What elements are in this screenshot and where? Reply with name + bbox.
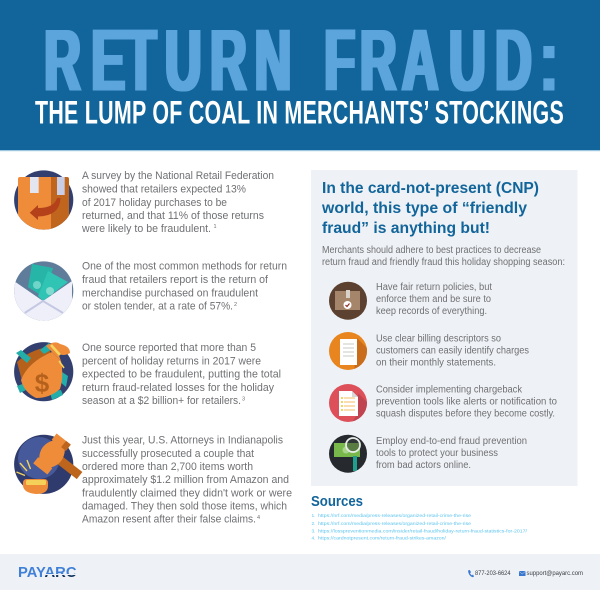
- text: Indianapolis paragraph: approximately $1.2 million from Amazon and: [82, 474, 289, 486]
- sources list: https://nrf.com/media/press-releases/organized-retail-crime-the-rise: [318, 521, 471, 527]
- text: fraud prevention tools: tools to protect your business: [376, 448, 498, 459]
- text: holiday returns paragraph: season at a $2 billion+ for retailers.: [82, 395, 241, 407]
- text: holiday returns paragraph: 3: [242, 396, 245, 402]
- header banner: [0, 0, 600, 151]
- text: survey paragraph: [81, 170, 274, 235]
- text: common methods paragraph: or stolen tender, at a rate of 57%.: [82, 301, 233, 313]
- sources list: 3.: [312, 528, 316, 534]
- icon: returned package: [14, 170, 73, 232]
- panel heading: [321, 180, 539, 237]
- sources list: 1.: [312, 513, 316, 519]
- text: Indianapolis paragraph: Amazon resent after their false claims.: [82, 514, 256, 526]
- panel intro text: Merchants should adhere to best practices to decrease: [322, 245, 541, 256]
- icon: money bag: [14, 342, 73, 401]
- sources heading: Sources: [311, 493, 363, 510]
- text: holiday returns paragraph: percent of holiday returns in 2017 were: [82, 355, 261, 367]
- support email: support@payarc.com: [526, 571, 583, 577]
- text: fraud prevention tools: [376, 436, 527, 471]
- text: survey paragraph: A survey by the National Retail Federation: [82, 170, 274, 182]
- text: chargeback prevention: Consider implementing chargeback: [376, 385, 523, 396]
- text: holiday returns paragraph: expected to be fraudulent, putting the total: [82, 369, 281, 381]
- text: survey paragraph: were likely to be fraudulent.: [81, 223, 211, 235]
- panel: CNP best practices: [311, 170, 578, 486]
- phone number: 877-203-6624: [475, 571, 511, 577]
- text: billing descriptors: on their monthly statements.: [376, 358, 496, 368]
- icon: envelope: [519, 571, 526, 576]
- text: Indianapolis paragraph: 4: [257, 515, 260, 521]
- text: holiday returns paragraph: [82, 342, 281, 407]
- text: fair return policies: keep records of everything.: [376, 306, 487, 317]
- icon: checklist document: [329, 384, 367, 422]
- text: fraud prevention tools: Employ end-to-end fraud prevention: [376, 436, 527, 447]
- panel heading: In the card-not-present (CNP): [322, 180, 539, 197]
- logo: PAYARC: [18, 565, 77, 581]
- text: billing descriptors: Use clear billing descriptors so: [376, 334, 501, 345]
- text: common methods paragraph: merchandise purchased on fraudulent: [82, 287, 258, 299]
- text: chargeback prevention: prevention tools like alerts or notification to: [376, 397, 557, 408]
- text: common methods paragraph: fraud that retailers report is the return of: [82, 274, 268, 286]
- text: Indianapolis paragraph: ordered more than 2,700 items worth: [82, 461, 253, 473]
- text: billing descriptors: customers can easily identify charges: [376, 346, 529, 357]
- icon: gavel: [14, 432, 91, 494]
- text: survey paragraph: of 2017 holiday purchases to be: [82, 197, 227, 209]
- text: survey paragraph: 1: [214, 224, 217, 230]
- sources list: [312, 513, 528, 541]
- text: survey paragraph: showed that retailers expected 13%: [82, 184, 247, 196]
- sources list: https://cardnotpresent.com/return-fraud-strikes-amazon/: [318, 535, 447, 541]
- panel heading: fraud” is anything but!: [322, 220, 490, 237]
- text: Indianapolis paragraph: [82, 435, 292, 526]
- text: fair return policies: [376, 282, 492, 317]
- sources list: 4.: [312, 535, 316, 541]
- text: fraud prevention tools: from bad actors online.: [376, 460, 471, 471]
- footer: [0, 554, 600, 590]
- icon: money bag: $: [35, 368, 50, 398]
- icon: receipt: [329, 332, 367, 370]
- text: Indianapolis paragraph: Just this year, U.S. Attorneys in Indianapolis: [82, 435, 283, 447]
- sources list: https://nrf.com/media/press-releases/organized-retail-crime-the-rise: [318, 513, 471, 519]
- text: Indianapolis paragraph: successfully prosecuted a couple that: [82, 448, 254, 460]
- text: chargeback prevention: [376, 385, 557, 420]
- panel intro text: [322, 245, 565, 268]
- text: Indianapolis paragraph: damaged. They then sold those items, which: [82, 500, 287, 512]
- text: chargeback prevention: squash disputes before they become costly.: [376, 409, 555, 420]
- title: RETURN FRAUD:: [44, 12, 557, 110]
- text: survey paragraph: returned, and that 11% of those returns: [82, 210, 264, 222]
- text: common methods paragraph: One of the most common methods for return: [82, 261, 287, 273]
- sources list: 2.: [312, 521, 316, 527]
- text: fair return policies: Have fair return policies, but: [376, 282, 492, 293]
- text: Indianapolis paragraph: fraudulently claimed they didn't work or were: [82, 487, 292, 499]
- sources list: https://losspreventionmedia.com/insider/retail-fraud/holiday-return-fraud-statistics-for-2017/: [318, 528, 528, 534]
- icon: magnifying glass on cash: [329, 435, 367, 473]
- text: holiday returns paragraph: One source reported that more than 5: [82, 342, 256, 354]
- text: billing descriptors: [376, 334, 529, 368]
- text: holiday returns paragraph: return fraud-related losses for the holiday: [82, 382, 275, 394]
- panel heading: world, this type of “friendly: [321, 200, 527, 217]
- icon: brown box: [329, 282, 367, 320]
- text: common methods paragraph: [82, 261, 287, 313]
- icon: envelope with cash: [14, 261, 73, 325]
- text: common methods paragraph: 2: [234, 302, 237, 308]
- icon: phone: [468, 570, 474, 577]
- text: fair return policies: enforce them and be sure to: [376, 294, 491, 305]
- panel intro text: return fraud and friendly fraud this holiday shopping season:: [322, 257, 565, 268]
